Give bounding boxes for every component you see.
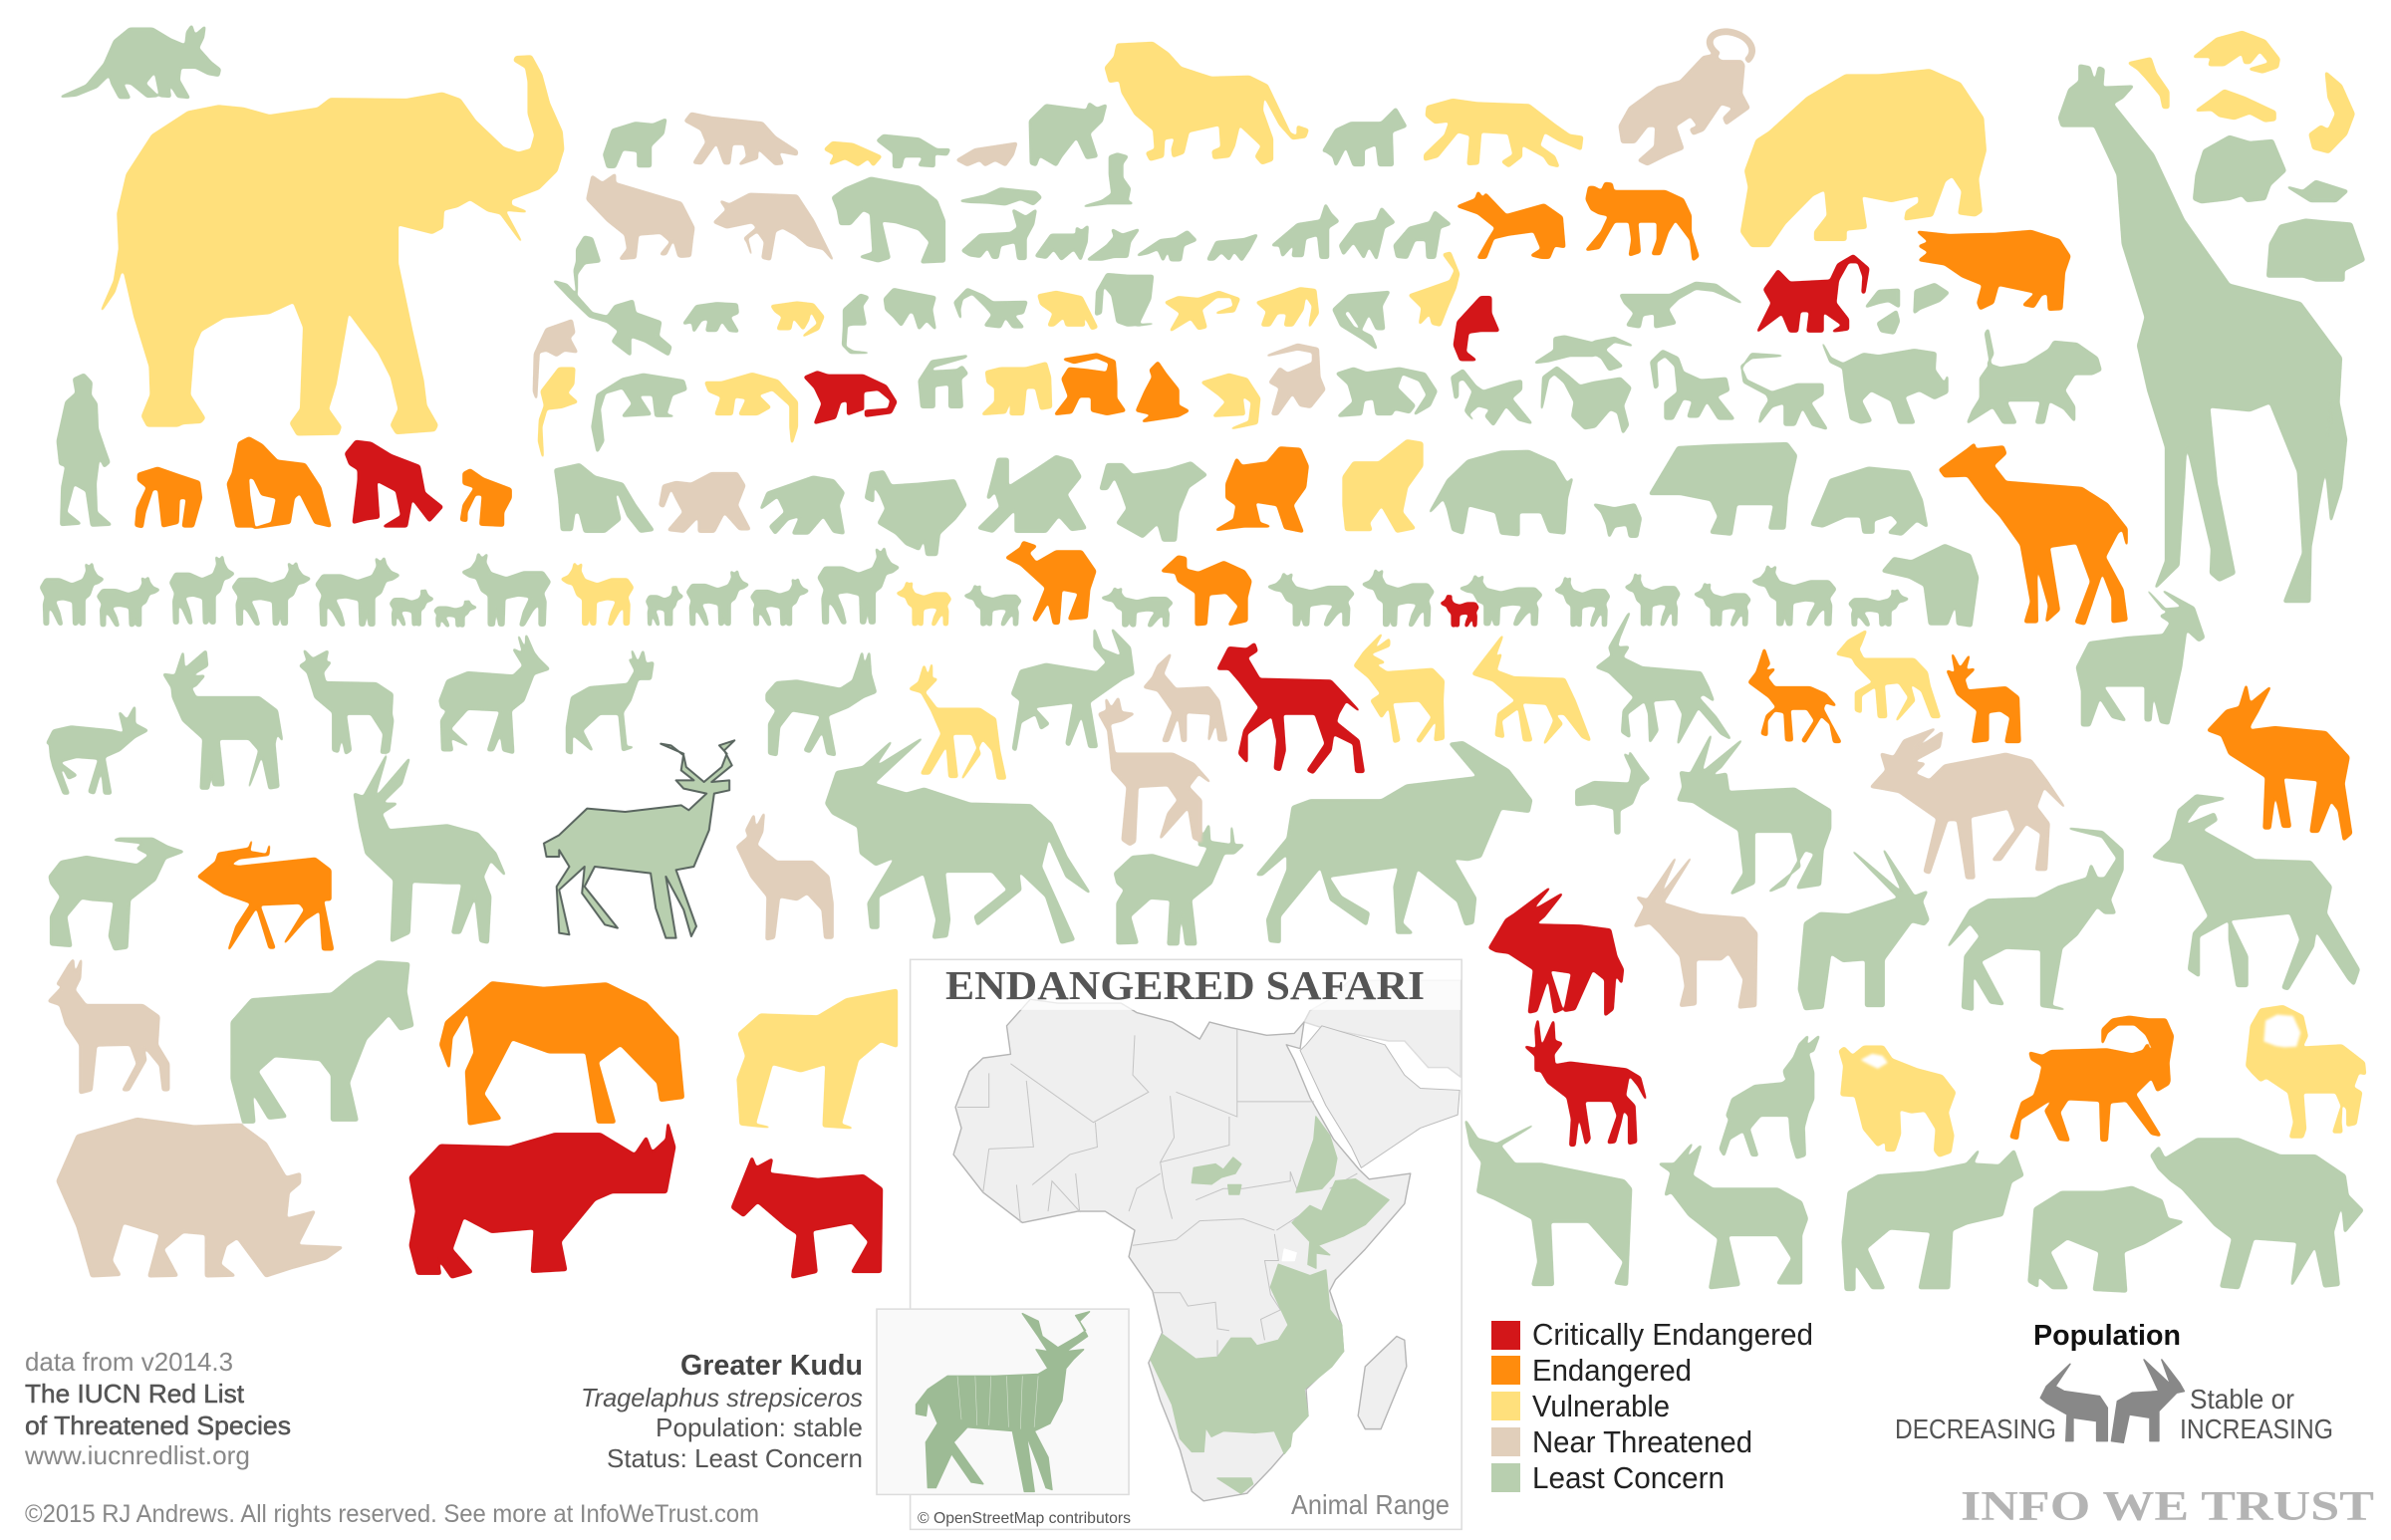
monkey green <box>592 375 686 452</box>
baboon 5 <box>1101 462 1206 541</box>
eland right <box>1257 742 1531 942</box>
lake <box>1282 1249 1296 1260</box>
monkey small yellow <box>771 303 824 336</box>
panel: lower right bovids <box>1465 1121 2363 1292</box>
addax <box>1489 889 1623 1015</box>
impala tan <box>49 959 168 1093</box>
land north <box>1304 980 1461 1077</box>
panel: Africa range map <box>877 959 1461 1529</box>
leaping monkey <box>554 281 670 355</box>
colobus thin <box>885 289 935 329</box>
addra gazelle red <box>1525 1020 1646 1146</box>
black wildebeest <box>2028 1187 2183 1292</box>
pangolin rolled <box>2197 91 2275 122</box>
warthog 1 <box>1823 344 1948 423</box>
monkey tail up green <box>919 356 967 407</box>
gazelle tan centre-left <box>737 814 833 939</box>
monkey orange tail loop <box>1055 354 1125 414</box>
gazelle green large-horned <box>1597 613 1730 744</box>
gazelle: lechwe <box>49 839 183 949</box>
giraffe <box>2059 65 2346 602</box>
legend: population: Stable or <box>2190 1384 2294 1414</box>
hippo <box>1741 70 1986 246</box>
monkey tail up <box>954 289 1027 328</box>
gazelle green left edge <box>766 652 876 755</box>
text block: data source <box>24 1347 291 1470</box>
waterbuck <box>1678 735 1830 894</box>
duiker orange 1 <box>1006 542 1095 624</box>
tiny primates <box>1866 284 1949 334</box>
panel: top-middle animals <box>805 43 1631 555</box>
pangolin small <box>2129 58 2169 108</box>
map frame <box>911 959 1461 1529</box>
map credit: © OpenStreetMap contributors <box>918 1510 1131 1527</box>
fox 3 <box>1138 231 1196 260</box>
panel: small antelopes and gazelles left <box>41 554 808 949</box>
monkey green 4 <box>1333 292 1389 349</box>
panel: middle antelopes <box>737 542 1623 1015</box>
monkey red walking <box>805 372 896 423</box>
badger tan <box>957 143 1016 165</box>
okapi <box>1940 444 2127 625</box>
mongoose yellow <box>825 142 881 165</box>
panel: top-right animals <box>1586 32 2364 627</box>
zebra green <box>231 961 412 1123</box>
duiker orange 2 <box>1162 556 1251 625</box>
ethiopian wolf <box>1458 192 1564 258</box>
oryx green <box>1799 850 1929 1009</box>
bonobo <box>461 469 511 526</box>
topi <box>1660 1144 1807 1288</box>
baboon 4 <box>978 456 1086 532</box>
baboon 3 <box>866 471 965 555</box>
icon: increasing oryx <box>2111 1360 2184 1442</box>
jackal 1 <box>1272 204 1338 258</box>
monkey row end 2 <box>1741 354 1827 429</box>
brown hyena green <box>833 178 944 263</box>
cat green <box>878 135 949 167</box>
small antelope row middle <box>818 548 1609 627</box>
ibex yellow <box>2247 1006 2365 1138</box>
jackal 3 <box>1394 211 1451 258</box>
gazelle orange 1 <box>1749 649 1840 742</box>
sable antelope <box>1949 829 2123 1010</box>
gazelle tan <box>1144 654 1226 741</box>
spotted hyena <box>714 194 833 260</box>
red monkey <box>1757 255 1869 332</box>
gazelle yellow 1 <box>910 664 1005 779</box>
legend: population <box>1895 1320 2333 1444</box>
chimpanzee <box>135 468 201 527</box>
warthog 2 <box>1968 330 2101 423</box>
ibex orange <box>2010 1017 2173 1141</box>
monkey yellow 5 <box>1202 375 1259 428</box>
black rhino <box>410 1124 674 1278</box>
caracal <box>1323 109 1406 165</box>
hanging monkey <box>575 236 600 294</box>
giant forest hog <box>1650 443 1796 535</box>
monkey green 7 <box>1541 368 1631 433</box>
panel: large animals bottom left <box>49 959 897 1278</box>
monkey yellow <box>705 374 797 443</box>
small rodent <box>2287 181 2347 201</box>
nyala-like green <box>1012 630 1134 750</box>
monkey yellow <box>1038 292 1097 329</box>
hartebeest <box>1465 1121 1631 1285</box>
range patch: South Africa <box>1217 1478 1253 1493</box>
gelada <box>1343 440 1423 532</box>
chevrotain <box>1594 504 1641 537</box>
lion <box>1106 43 1308 163</box>
monkey sitting yellow <box>539 369 577 457</box>
meerkat <box>1084 153 1133 206</box>
legend: conservation status <box>1491 1317 1813 1495</box>
monkey tan <box>534 320 577 398</box>
fox 2 <box>1036 226 1088 260</box>
elephant <box>102 56 563 434</box>
text block: greater kudu details: Greater Kudu <box>680 1350 863 1382</box>
fox 4 <box>1207 235 1257 260</box>
text block: greater kudu details: Status: Least Concern <box>607 1443 863 1473</box>
animal silhouettes <box>41 26 2365 1292</box>
jackal 2 <box>1340 208 1394 259</box>
wild dog <box>1586 183 1699 260</box>
land madagascar <box>1358 1337 1407 1429</box>
forest hog <box>1430 451 1572 535</box>
legend: conservation status: Near Threatened <box>1532 1424 1752 1459</box>
monkey green 6 <box>1452 370 1531 425</box>
monkey leaping 2 <box>1535 336 1594 363</box>
oryx tan <box>1635 859 1756 1008</box>
bushpig <box>1811 467 1927 535</box>
antelope orange <box>198 841 333 949</box>
monkey tan with looped tail <box>1620 32 1752 164</box>
legend: conservation status: Critically Endangered <box>1532 1317 1813 1352</box>
monkey row end 1 <box>1651 351 1733 418</box>
zebra orange grazing <box>440 982 683 1125</box>
text block: greater kudu details: Population: stable <box>656 1412 863 1442</box>
human <box>58 375 111 526</box>
hartebeest small <box>1721 1036 1819 1158</box>
land arabia <box>1300 1026 1460 1167</box>
gerenuk <box>1099 698 1209 845</box>
zebra yellow <box>737 990 897 1128</box>
gazelle orange 2 <box>1948 654 2020 742</box>
large horned antelope <box>355 755 505 943</box>
icon: decreasing oryx <box>2040 1364 2107 1441</box>
legend: conservation status: Least Concern <box>1532 1460 1725 1495</box>
title backing <box>912 960 1461 1010</box>
country borders <box>957 1030 1357 1427</box>
pangolin climbing <box>2309 73 2354 152</box>
gorilla red <box>346 441 442 527</box>
wild ass <box>732 1157 882 1278</box>
gazelle: grant's <box>567 650 654 754</box>
mountain nyala <box>2077 591 2204 725</box>
pangolin walking <box>2194 32 2279 73</box>
long-tailed green <box>1096 274 1153 326</box>
logo: info we trust: INFO WE TRUST <box>1961 1484 2374 1530</box>
text block: data source: www.iucnredlist.org <box>24 1440 250 1470</box>
porcupine 2 <box>2267 219 2364 281</box>
mandrill <box>1216 447 1308 532</box>
monkey yellow 2 <box>1166 292 1239 331</box>
text block: data source: The IUCN Red List <box>25 1379 245 1409</box>
panel: top-left animals <box>58 26 844 534</box>
wildebeest <box>1843 1151 2022 1290</box>
aardvark <box>61 26 220 98</box>
gazelle yellow 3 <box>1473 636 1590 744</box>
text block: data source: of Threatened Species <box>25 1411 291 1440</box>
map label: animal range: Animal Range <box>1291 1489 1450 1520</box>
copyright: ©2015 RJ Andrews. All rights reserved. See more at InfoWeTrust.com <box>25 1500 759 1528</box>
text block: greater kudu details <box>581 1350 863 1473</box>
aoudad <box>1840 1047 1955 1156</box>
gazelle: impala <box>439 635 549 753</box>
pygmy hippo <box>1918 231 2070 310</box>
gazelle: kob <box>163 650 282 789</box>
monkey yellow 3 <box>1257 288 1318 327</box>
baboon green 2 <box>761 477 844 534</box>
panel: ibex and small bovids <box>1525 1006 2365 1158</box>
monkey tan 2 <box>1267 345 1325 414</box>
gorilla orange <box>228 437 331 528</box>
striped hyena <box>587 174 693 259</box>
fennec fox <box>1088 229 1139 260</box>
range patch: east Africa <box>1292 1179 1389 1268</box>
inset card: kudu illustration <box>877 1309 1129 1494</box>
sitting monkey with tail <box>843 295 868 353</box>
cheetah <box>1425 100 1582 166</box>
monkey small green <box>683 303 738 332</box>
nyala orange <box>2208 685 2351 840</box>
highlighted greater kudu <box>544 740 734 938</box>
bongo small <box>1883 545 1978 627</box>
white rhino <box>57 1119 342 1276</box>
monkey yellow 4 <box>982 363 1051 414</box>
gazelle yellow 2 <box>1355 635 1444 742</box>
long-tailed monkey <box>1621 283 1741 328</box>
range patch: central Africa <box>1192 1157 1241 1184</box>
text block: data source: data from v2014.3 <box>25 1347 233 1377</box>
gazelle small green <box>1576 752 1649 834</box>
range patch: small central <box>1228 1184 1241 1194</box>
buffalo <box>2151 1139 2363 1288</box>
monkey green 5 <box>1337 369 1437 416</box>
small cat green <box>604 120 665 167</box>
title: ENDANGERED SAFARI <box>945 962 1425 1008</box>
baboon green <box>555 464 654 532</box>
range patch: southern Africa <box>1151 1264 1344 1453</box>
gazelle yellow 4 <box>1837 631 1940 720</box>
roan antelope <box>2153 795 2359 989</box>
monkey yellow tail up <box>1410 253 1459 326</box>
fox 1 <box>962 210 1036 259</box>
text block: greater kudu details: Tragelaphus strepsiceros <box>581 1383 863 1412</box>
monkey on branch <box>1594 338 1632 370</box>
legend: conservation status: Endangered <box>1532 1353 1692 1388</box>
gazelle green lower <box>1115 825 1243 944</box>
gazelle: oribi left <box>47 706 147 794</box>
legend: population: DECREASING <box>1895 1413 2056 1444</box>
gazelle: springbok <box>300 650 393 754</box>
reedbuck tan <box>1871 729 2064 879</box>
icons: population oryx pair <box>2040 1360 2184 1442</box>
porcupine 1 <box>2194 136 2285 202</box>
monkey orange sitting <box>1137 363 1189 421</box>
land africa <box>953 999 1411 1501</box>
panel: right antelopes <box>1576 591 2359 1010</box>
legend: conservation status: Vulnerable <box>1532 1389 1670 1423</box>
cat tan <box>685 114 797 164</box>
genet <box>960 188 1041 204</box>
small antelope row left <box>41 554 808 627</box>
legend: population: Population <box>2033 1320 2181 1352</box>
range patch: Sudan and Eritrea <box>1296 1117 1337 1192</box>
red dama gazelle <box>1217 643 1364 773</box>
serval <box>1030 104 1106 165</box>
eland left <box>826 739 1089 943</box>
baboon tan <box>660 473 750 532</box>
legend: population: INCREASING <box>2180 1413 2333 1444</box>
monkey red climbing <box>1455 297 1498 360</box>
duikers <box>1626 566 1908 626</box>
